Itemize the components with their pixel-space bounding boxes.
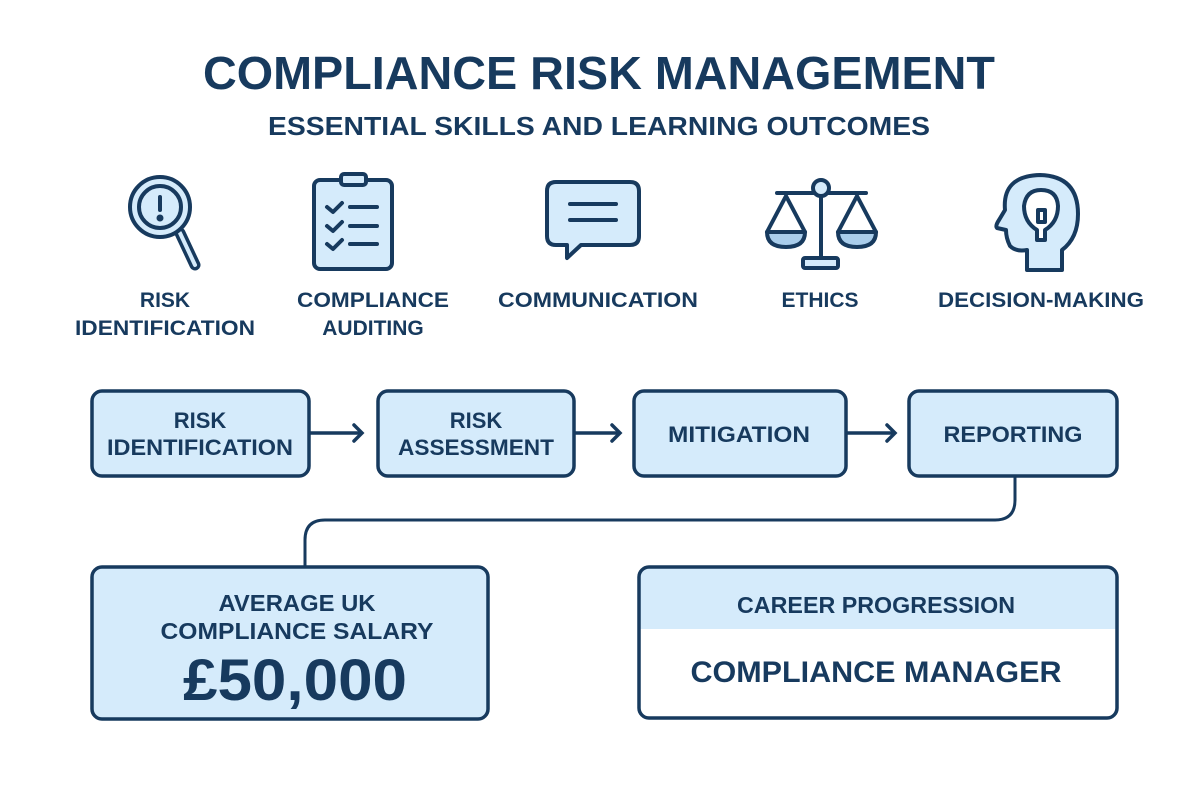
icon: head with lightbulb	[996, 175, 1078, 270]
connector line	[305, 477, 1015, 567]
arrow 2	[575, 425, 620, 441]
panel: salary: £50,000	[183, 648, 407, 713]
flow: mitigation	[634, 391, 846, 476]
skill labels	[75, 289, 1144, 340]
icon: magnifier	[130, 177, 195, 265]
flow: risk identification	[92, 391, 309, 476]
flow: mitigation: MITIGATION	[668, 422, 810, 447]
flow: reporting: REPORTING	[944, 422, 1082, 447]
flow: risk assessment	[378, 391, 574, 476]
icon: clipboard checklist	[314, 174, 392, 269]
title: COMPLIANCE RISK MANAGEMENT	[203, 47, 995, 99]
arrow 3	[847, 425, 895, 441]
skill labels: AUDITING	[322, 317, 424, 340]
panel: salary: AVERAGE UK	[218, 590, 376, 616]
flow: reporting	[909, 391, 1117, 476]
arrow 1	[310, 425, 362, 441]
flow: risk assessment: RISK	[450, 408, 502, 433]
flow: risk identification: RISK	[174, 408, 226, 433]
skill labels: COMMUNICATION	[498, 289, 698, 312]
skill labels: RISK	[140, 289, 190, 312]
skill labels: ETHICS	[781, 289, 859, 312]
icon: scales	[767, 180, 876, 268]
skill labels: IDENTIFICATION	[75, 317, 255, 340]
panel: career progression	[639, 567, 1117, 718]
panel: salary	[92, 567, 488, 719]
subtitle: ESSENTIAL SKILLS AND LEARNING OUTCOMES	[268, 111, 930, 141]
skill labels: COMPLIANCE	[297, 289, 449, 312]
skill labels: DECISION-MAKING	[938, 289, 1144, 312]
icon: speech bubble	[547, 182, 639, 258]
flow: risk assessment: ASSESSMENT	[398, 435, 555, 460]
panel: salary: COMPLIANCE SALARY	[160, 618, 434, 644]
panel: career progression: COMPLIANCE MANAGER	[690, 656, 1062, 689]
flow: risk identification: IDENTIFICATION	[107, 435, 293, 460]
panel: career progression: CAREER PROGRESSION	[737, 592, 1015, 618]
